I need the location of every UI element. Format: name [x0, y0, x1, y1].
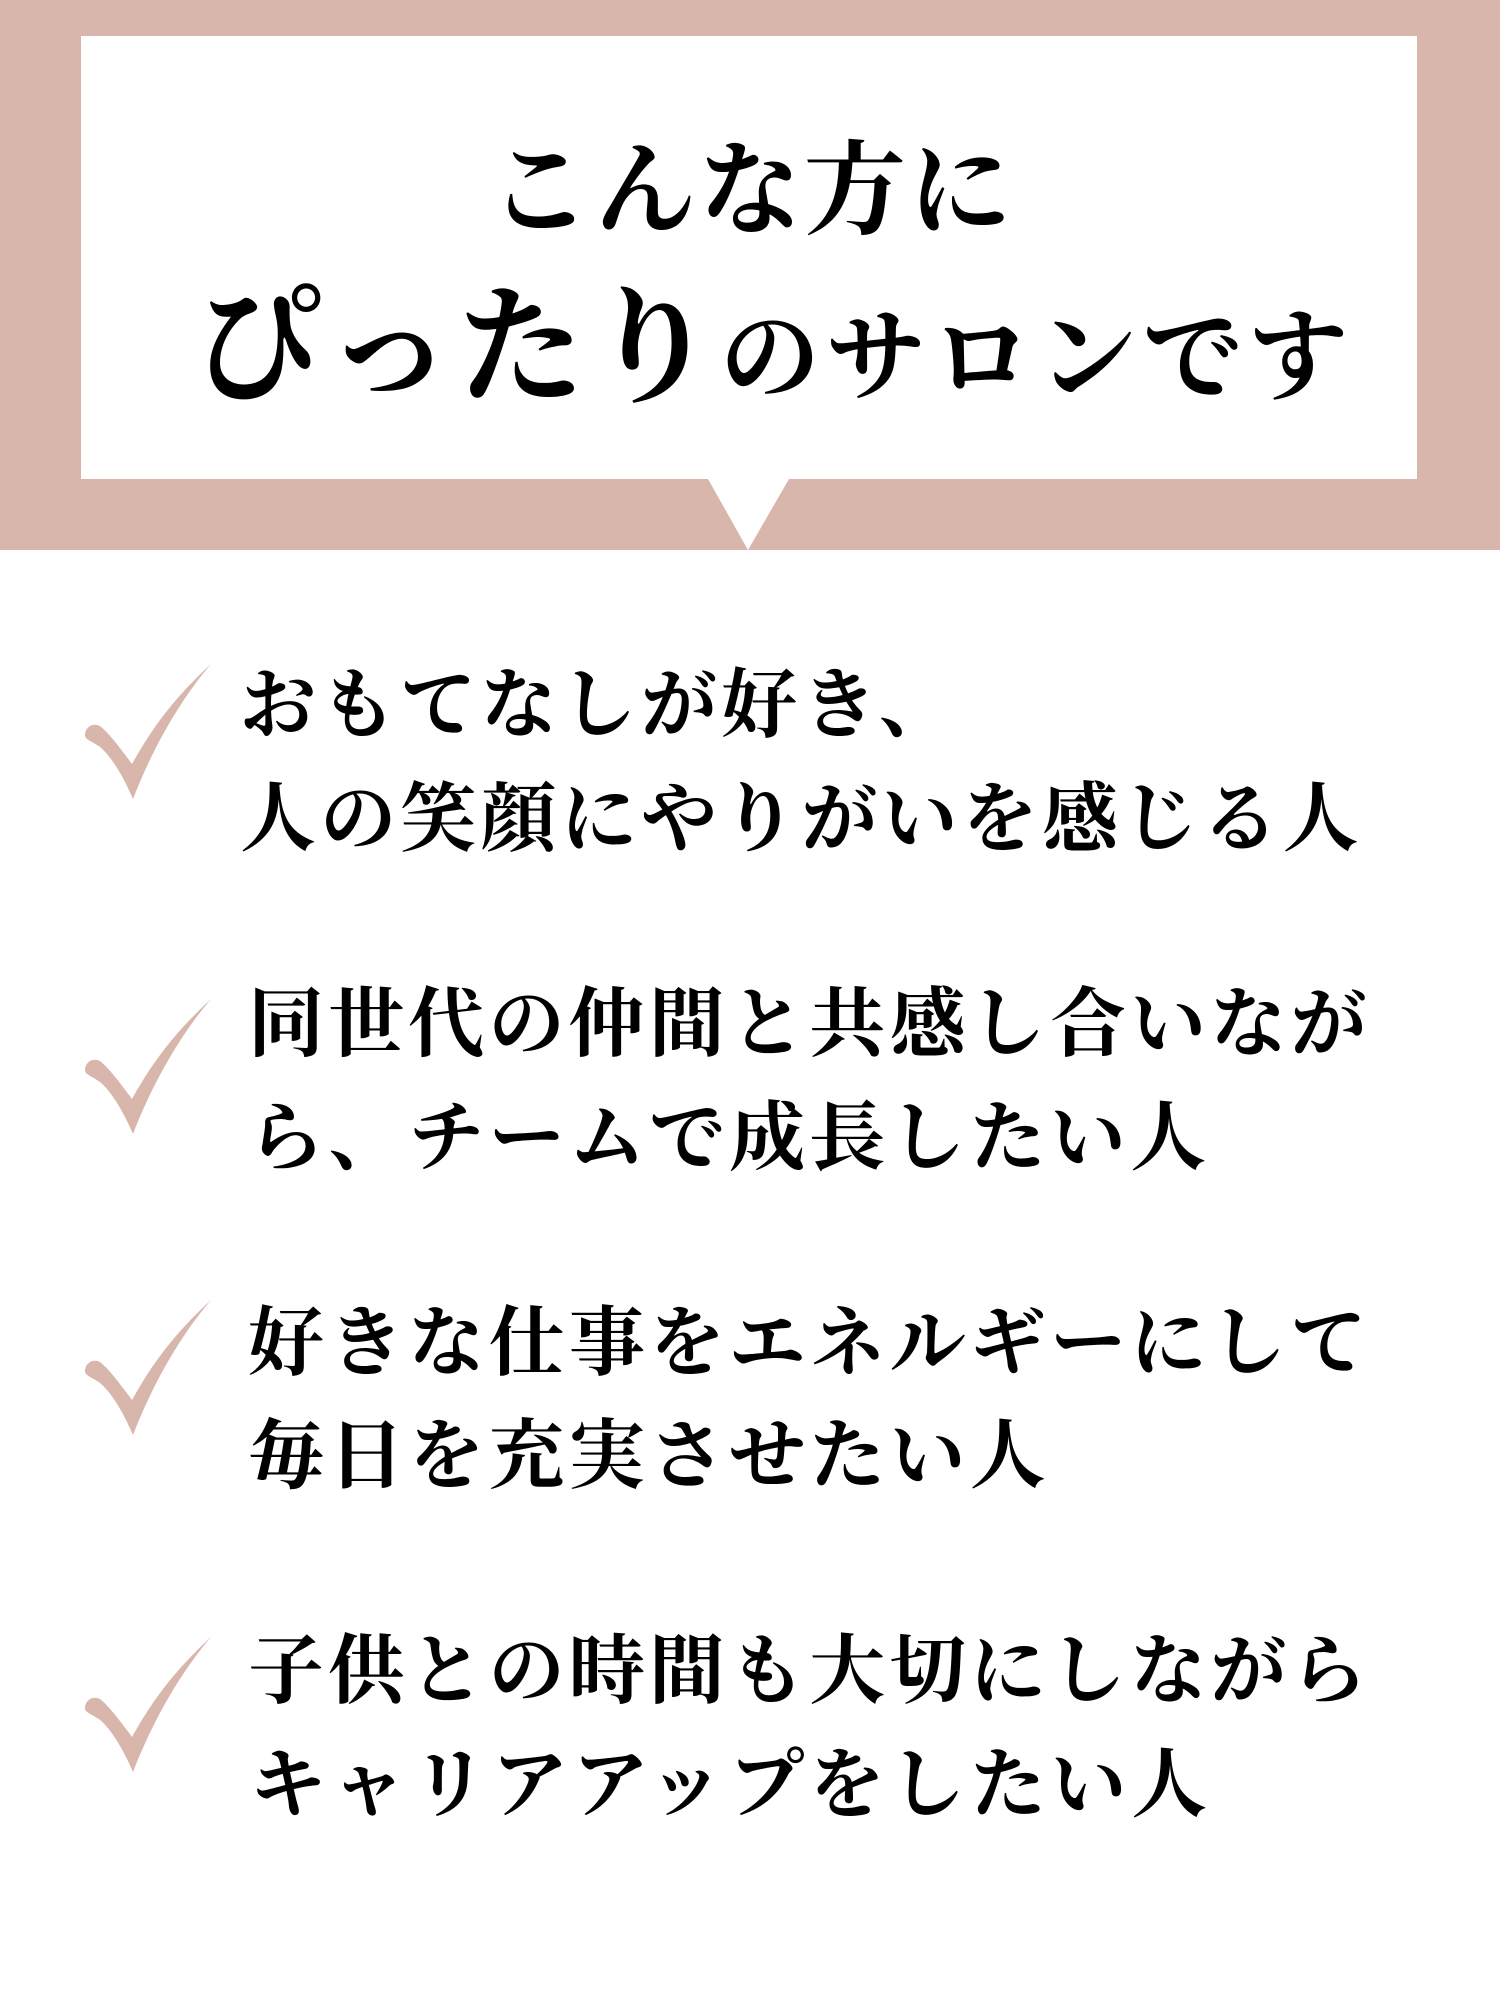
- item 4 text: キャリアアップをしたい人: [250, 1744, 1212, 1828]
- check item 1: [85, 664, 1363, 862]
- item 3 text: [248, 1302, 1371, 1499]
- speech bubble background: [0, 0, 1500, 550]
- header panel: [0, 0, 1500, 550]
- item 3 text: 毎日を充実させたい人: [248, 1415, 1050, 1499]
- item 1 text: おもてなしが好き、: [240, 664, 959, 748]
- item 2 text: [248, 983, 1371, 1181]
- title line 1: こんな方に: [489, 136, 1014, 249]
- item 3 text: 好きな仕事をエネルギーにして: [248, 1302, 1371, 1386]
- item 1 text: [240, 664, 1363, 862]
- check item 3: [85, 1300, 1371, 1499]
- item 2 text: 同世代の仲間と共感し合いなが: [248, 983, 1371, 1067]
- icon: check mark: [85, 1637, 211, 1772]
- title line 2: ぴったりのサロンです: [193, 278, 1354, 420]
- item 1 text: 人の笑顔にやりがいを感じる人: [240, 778, 1363, 862]
- check item 4: [85, 1630, 1371, 1828]
- item 4 text: 子供との時間も大切にしながら: [248, 1630, 1371, 1714]
- item 2 text: ら、チームで成長したい人: [248, 1097, 1210, 1181]
- icon: check mark: [85, 664, 211, 799]
- icon: check mark: [85, 1300, 211, 1435]
- check item 2: [85, 983, 1371, 1181]
- item 4 text: [248, 1630, 1371, 1828]
- icon: check mark: [85, 999, 211, 1134]
